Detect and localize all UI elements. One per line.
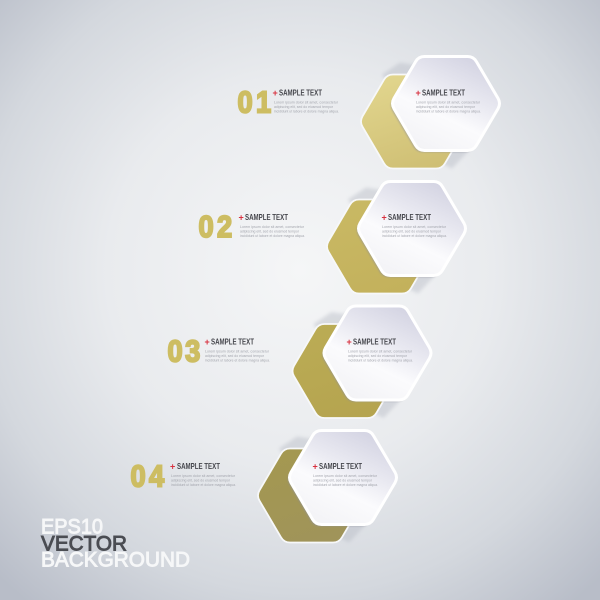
left text block: step 1: SAMPLE TEXT	[279, 88, 323, 98]
hexagon text block: step 4: adipiscing elit, sed do eiusmod tempor	[313, 478, 373, 482]
left text block: step 1: Lorem ipsum dolor sit amet, consectetur	[274, 100, 339, 104]
hexagon text block: step 3	[346, 336, 413, 362]
hexagon text block: step 4: SAMPLE TEXT	[319, 461, 363, 471]
left text block: step 1: adipiscing elit, sed do eiusmod tempor	[274, 104, 334, 109]
left text block: step 4: +	[170, 462, 175, 472]
hexagon text block: step 1: adipiscing elit, sed do eiusmod tempor	[416, 104, 476, 109]
hexagon text block: step 4: incididunt ut labore et dolore magna aliqua.	[313, 482, 378, 487]
left text block: step 4: adipiscing elit, sed do eiusmod tempor	[171, 478, 231, 482]
left text block: step 4	[170, 461, 236, 487]
left text block: step 4: Lorem ipsum dolor sit amet, consectetur	[171, 473, 236, 478]
hexagon text block: step 1: incididunt ut labore et dolore magna aliqua.	[416, 108, 481, 114]
left text block: step 3: Lorem ipsum dolor sit amet, consectetur	[205, 348, 270, 354]
hexagon text block: step 3: Lorem ipsum dolor sit amet, consectetur	[348, 348, 413, 354]
front hexagon shadow: step 1	[390, 58, 498, 152]
footer title: BACKGROUND	[41, 548, 190, 572]
front hexagon: step 1	[392, 56, 500, 150]
left text block: step 3: SAMPLE TEXT	[211, 336, 255, 346]
shadow: step 2	[348, 188, 434, 294]
footer title	[41, 516, 190, 572]
number 02: 02	[198, 210, 232, 244]
hexagon text block: step 1: +	[416, 88, 421, 98]
number 04: 04	[130, 460, 165, 494]
shadow: step 1	[382, 62, 468, 168]
hexagon text block: step 3: +	[346, 337, 352, 347]
hexagon text block: step 3: adipiscing elit, sed do eiusmod tempor	[348, 353, 408, 358]
footer title: VECTOR	[41, 532, 127, 556]
hexagon text block: step 1	[416, 88, 481, 114]
step 3 hexagons	[292, 306, 431, 418]
number 03: 03	[168, 335, 200, 369]
left text block: step 2: SAMPLE TEXT	[245, 212, 289, 222]
back hexagon: step 2	[327, 200, 434, 294]
hexagon text block: step 1: SAMPLE TEXT	[422, 88, 466, 98]
front hexagon: step 3	[324, 306, 431, 400]
shadow: step 4	[279, 436, 365, 542]
left text block: step 2	[238, 212, 305, 238]
left text block: step 2: Lorem ipsum dolor sit amet, consectetur	[240, 224, 305, 229]
left text block: step 3	[204, 336, 270, 362]
hexagon text block: step 4	[312, 461, 378, 487]
hexagon text block: step 2: adipiscing elit, sed do eiusmod tempor	[382, 228, 442, 234]
step 2 hexagons	[327, 182, 466, 294]
left text block: step 4: incididunt ut labore et dolore magna aliqua.	[171, 482, 236, 487]
hexagon text block: step 2: SAMPLE TEXT	[388, 212, 432, 222]
front hexagon shadow: step 3	[322, 308, 429, 402]
left text block: step 1: +	[272, 88, 278, 98]
back hexagon: step 1	[361, 74, 468, 168]
left text block: step 1: incididunt ut labore et dolore magna aliqua.	[274, 108, 339, 114]
shadow: step 3	[314, 312, 400, 418]
hexagon text block: step 2: incididunt ut labore et dolore magna aliqua.	[382, 233, 447, 238]
left text block: step 3: incididunt ut labore et dolore magna aliqua.	[205, 358, 270, 362]
hexagon text block: step 2: +	[382, 212, 387, 222]
hexagon text block: step 2: Lorem ipsum dolor sit amet, consectetur	[382, 224, 447, 229]
left text block: step 2: incididunt ut labore et dolore magna aliqua.	[240, 233, 305, 238]
hexagon text block: step 4: Lorem ipsum dolor sit amet, consectetur	[313, 473, 378, 478]
left text block: step 3: adipiscing elit, sed do eiusmod tempor	[205, 353, 265, 358]
left text block: step 3: +	[204, 337, 210, 347]
front hexagon shadow: step 2	[356, 184, 464, 278]
hexagon text block: step 4: +	[312, 462, 318, 472]
front hexagon: step 2	[358, 182, 466, 276]
hexagon text block: step 3: incididunt ut labore et dolore magna aliqua.	[348, 358, 413, 362]
back hexagon: step 4	[258, 448, 365, 542]
left text block: step 2: +	[238, 212, 244, 222]
back hexagon: step 3	[292, 324, 400, 418]
front hexagon: step 4	[290, 430, 396, 524]
step 1 hexagons	[361, 56, 500, 168]
hexagon text block: step 2	[382, 212, 447, 238]
front hexagon shadow: step 4	[288, 432, 394, 526]
footer title: EPS10	[41, 516, 103, 538]
left text block: step 1	[272, 88, 339, 114]
step 4 hexagons	[258, 430, 396, 542]
left text block: step 2: adipiscing elit, sed do eiusmod tempor	[240, 228, 300, 234]
left text block: step 4: SAMPLE TEXT	[177, 461, 221, 471]
hexagon text block: step 3: SAMPLE TEXT	[353, 336, 397, 346]
number 01: 01	[238, 86, 271, 120]
hexagon text block: step 1: Lorem ipsum dolor sit amet, consectetur	[416, 100, 481, 104]
